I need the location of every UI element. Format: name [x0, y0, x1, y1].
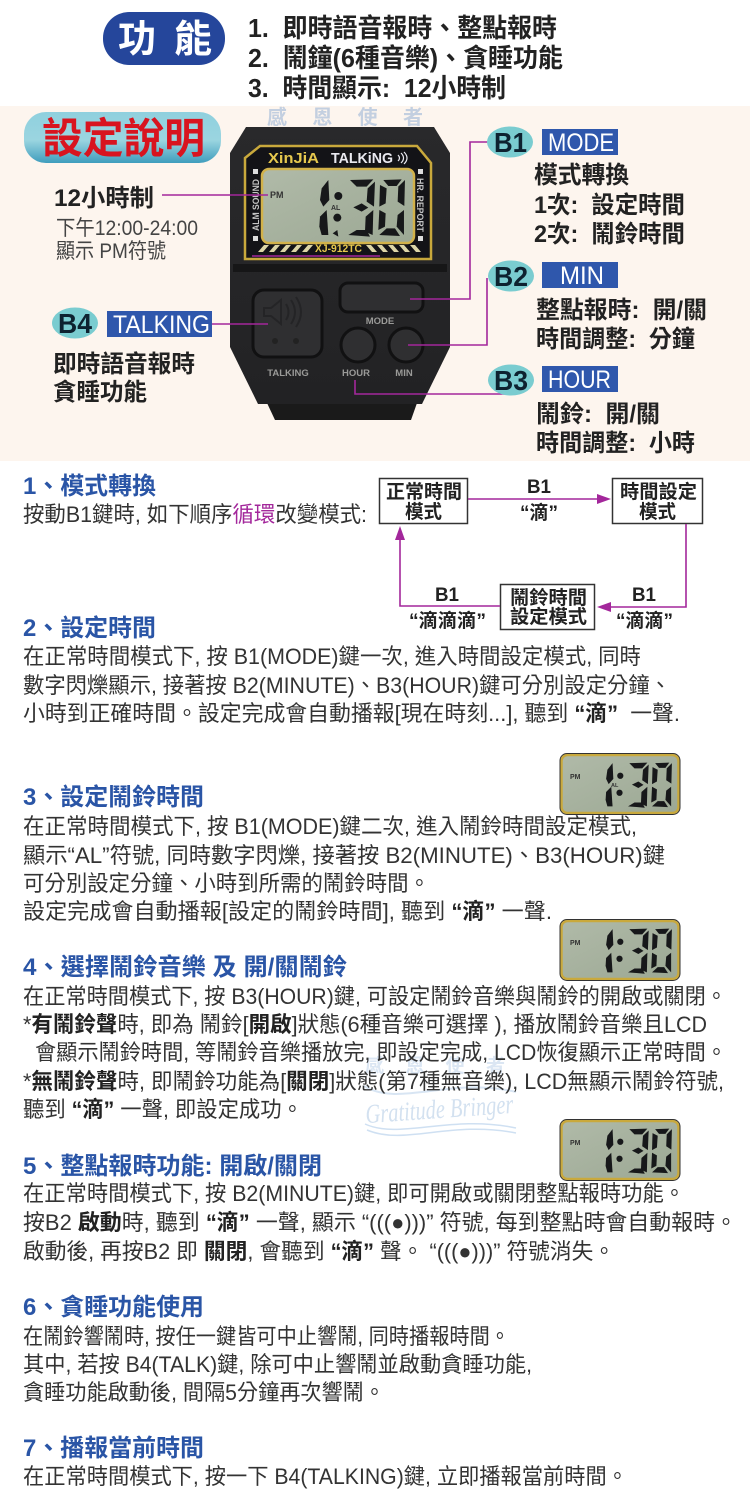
- callout: B4 TALKING: [52, 308, 212, 406]
- flow labels: [409, 477, 673, 632]
- section 4: alarm music: 在正常時間模式下, 按 B3(HOUR)鍵, 可設定鬧鈴音樂與鬧鈴的開啟或關閉。: [23, 984, 727, 1009]
- callout: B4 TALKING: TALKING: [113, 311, 210, 339]
- section 1: mode switching: 1、模式轉換: [23, 473, 156, 500]
- section 7: announce current time: [23, 1435, 628, 1489]
- callout: B3 HOUR: HOUR: [548, 366, 611, 394]
- callout: B2 MIN: 整點報時: 開/關: [536, 297, 707, 324]
- bezel labels: ALM SOUND: [251, 179, 261, 231]
- connector lines: [162, 142, 506, 394]
- box: alarm setting mode: 設定模式: [510, 605, 587, 628]
- gold bezel: [245, 146, 431, 259]
- LCD image 1: AL: [611, 783, 619, 789]
- box: time setting mode: 時間設定: [620, 480, 697, 503]
- flow labels: “滴滴”: [616, 609, 673, 632]
- section 4: alarm music: 4、選擇鬧鈴音樂 及 開/關鬧鈴: [23, 954, 347, 981]
- bezel labels: HR. REPORT: [415, 178, 425, 232]
- callout: B2 MIN: [488, 260, 707, 353]
- section 6: snooze: [23, 1294, 532, 1405]
- section 6: snooze: 貪睡功能啟動後, 間隔5分鐘再次響鬧。: [23, 1380, 385, 1405]
- callout: B4 TALKING: 貪睡功能: [53, 379, 147, 406]
- LCD image 1: [560, 754, 680, 814]
- LCD image 3: PM: [570, 1140, 581, 1147]
- callout: B4 TALKING: B4: [58, 308, 92, 339]
- flow labels: B1: [435, 585, 459, 606]
- button labels: HOUR: [342, 368, 370, 379]
- heading: setting instructions pill: 設定說明: [42, 115, 205, 162]
- flow labels: “滴”: [520, 501, 558, 524]
- watermark: Gratitude Bringer: Gratitude Bringer: [365, 1089, 515, 1129]
- flow diagram: [380, 477, 702, 632]
- section 4: alarm music: *無鬧鈴聲時, 即鬧鈴功能為[關閉]狀態(第7種無音樂), LCD無顯示鬧鈴符號,: [23, 1069, 724, 1094]
- LCD image 2: PM: [570, 940, 581, 947]
- button: minute: [389, 328, 423, 362]
- button labels: MIN: [395, 368, 413, 379]
- callout: 12 hour system: 12小時制: [54, 185, 154, 212]
- section 5: hourly chime: 5、整點報時功能: 開啟/關閉: [23, 1153, 322, 1180]
- callout: B2 MIN: B2: [494, 261, 528, 292]
- button: hour: [341, 328, 375, 362]
- device: talking watch: [230, 127, 450, 420]
- LCD image 2: [560, 920, 680, 980]
- section 3: set alarm: 3、設定鬧鈴時間: [23, 784, 204, 811]
- section 4: alarm music: 會顯示鬧鈴時間, 等鬧鈴音樂播放完, 即設定完成, LCD恢復顯示正常時間。: [35, 1040, 727, 1065]
- callout: B1 MODE: 1次: 設定時間: [534, 192, 685, 219]
- callout: B1 MODE: [487, 126, 685, 248]
- flow labels: B1: [527, 477, 551, 498]
- section 2: set time: 2、設定時間: [23, 615, 156, 642]
- section 5: hourly chime: 在正常時間模式下, 按 B2(MINUTE)鍵, 即可開啟或關閉整點報時功能。: [23, 1181, 685, 1206]
- bezel labels: TALKiNG: [331, 150, 393, 167]
- section 1: mode switching: 按動B1鍵時, 如下順序循環改變模式:: [23, 502, 367, 527]
- box: alarm setting mode: [500, 584, 594, 630]
- callout: B3 HOUR: [488, 364, 695, 457]
- flow labels: B1: [632, 585, 656, 606]
- section 4: alarm music: *有鬧鈴聲時, 即為 鬧鈴[開啟]狀態(6種音樂可選擇 ), 播放鬧鈴音樂且LCD: [23, 1012, 707, 1037]
- section 4: alarm music: [23, 954, 727, 1122]
- watermark: Gratitude Bringer: 感 恩 使 者: [365, 1054, 505, 1077]
- arrow: time setting to alarm setting: [597, 524, 686, 612]
- text block: features list: 2. 鬧鐘(6種音樂)、貪睡功能: [248, 43, 563, 73]
- callout: B3 HOUR: 鬧鈴: 開/關: [536, 401, 660, 428]
- text block: features list: 1. 即時語音報時、整點報時: [248, 13, 557, 43]
- main LCD: AL: [331, 205, 341, 212]
- text block: features list: 3. 時間顯示: 12小時制: [248, 73, 506, 103]
- bezel labels: XJ-912TC: [315, 243, 362, 255]
- text block: features list: [248, 13, 563, 103]
- box: normal time mode: [380, 478, 468, 524]
- heading: features pill: 能: [174, 19, 212, 61]
- callout: B3 HOUR: 時間調整: 小時: [536, 430, 695, 457]
- section 4: alarm music: 聽到 “滴” 一聲, 即設定成功。: [23, 1097, 303, 1122]
- callout: B1 MODE: 2次: 鬧鈴時間: [534, 221, 685, 248]
- bezel labels: XinJiA: [268, 150, 319, 167]
- arrow: normal to time setting: [468, 494, 611, 504]
- box: normal time mode: 正常時間: [386, 481, 462, 503]
- callout: B1 MODE: MODE: [548, 129, 614, 157]
- section 3: set alarm: 設定完成會自動播報[設定的鬧鈴時間], 聽到 “滴” 一聲.: [23, 899, 552, 924]
- main LCD: [262, 169, 414, 243]
- callout: B3 HOUR: B3: [494, 365, 528, 396]
- button labels: [267, 316, 413, 379]
- panel: setting background: [0, 106, 750, 461]
- section 2: set time: 在正常時間模式下, 按 B1(MODE)鍵一次, 進入時間設定模式, 同時: [23, 644, 641, 669]
- button: talking: [253, 290, 322, 357]
- arrow: alarm setting to normal: [395, 526, 500, 606]
- LCD image 3: [560, 1120, 680, 1180]
- section 2: set time: 小時到正確時間。設定完成會自動播報[現在時刻...], 聽到 “滴” 一聲.: [23, 701, 680, 726]
- LCD image 1: PM: [570, 774, 581, 781]
- section 5: hourly chime: [23, 1153, 737, 1264]
- callout: 12 hour system: [54, 185, 198, 263]
- section 6: snooze: 其中, 若按 B4(TALK)鍵, 除可中止響鬧並啟動貪睡功能,: [23, 1352, 532, 1377]
- heading: features pill: 功: [118, 19, 156, 61]
- box: normal time mode: 模式: [405, 501, 442, 523]
- section 3: set alarm: [23, 784, 665, 924]
- section 7: announce current time: 7、播報當前時間: [23, 1435, 204, 1462]
- section 1: mode switching: [23, 473, 367, 527]
- section 3: set alarm: 顯示“AL”符號, 同時數字閃爍, 接著按 B2(MINUTE)、B3(HOUR)鍵: [23, 843, 665, 868]
- heading: features pill: [103, 12, 225, 65]
- section 3: set alarm: 可分別設定分鐘、小時到所需的鬧鈴時間。: [23, 871, 430, 896]
- section 5: hourly chime: 啟動後, 再按B2 即 關閉, 會聽到 “滴” 聲。 “(((●)))” 符號消失。: [23, 1239, 615, 1264]
- callout: B2 MIN: MIN: [560, 262, 604, 290]
- section 3: set alarm: 在正常時間模式下, 按 B1(MODE)鍵二次, 進入鬧鈴時間設定模式,: [23, 814, 637, 839]
- bezel labels: [251, 150, 425, 255]
- button: mode: [340, 283, 423, 312]
- callout: 12 hour system: 顯示 PM符號: [56, 240, 166, 263]
- callout: 12 hour system: 下午12:00-24:00: [56, 217, 198, 240]
- button labels: MODE: [366, 316, 394, 327]
- section 6: snooze: 在鬧鈴響鬧時, 按任一鍵皆可中止響鬧, 同時播報時間。: [23, 1324, 510, 1349]
- callout: B4 TALKING: 即時語音報時: [53, 351, 195, 378]
- watch base: [267, 403, 417, 420]
- box: time setting mode: 模式: [639, 501, 676, 523]
- section 2: set time: 數字閃爍顯示, 接著按 B2(MINUTE)、B3(HOUR)鍵可分別設定分鐘、: [23, 673, 671, 698]
- main LCD: PM: [270, 190, 284, 200]
- callout: B1 MODE: B1: [494, 127, 527, 158]
- box: time setting mode: [612, 478, 702, 524]
- watermark: Gratitude Bringer: [364, 1054, 516, 1135]
- flow labels: “滴滴滴”: [409, 609, 486, 632]
- button labels: TALKING: [267, 368, 309, 379]
- section 6: snooze: 6、貪睡功能使用: [23, 1294, 204, 1321]
- callout: B2 MIN: 時間調整: 分鐘: [536, 326, 695, 353]
- section 2: set time: [23, 615, 680, 726]
- section 5: hourly chime: 按B2 啟動時, 聽到 “滴” 一聲, 顯示 “(((●)))” 符號, 每到整點時會自動報時。: [23, 1210, 737, 1235]
- watch body: [230, 127, 450, 404]
- section 7: announce current time: 在正常時間模式下, 按一下 B4(TALKING)鍵, 立即播報當前時間。: [23, 1464, 628, 1489]
- box: alarm setting mode: 鬧鈴時間: [510, 587, 587, 609]
- callout: B1 MODE: 模式轉換: [534, 162, 629, 189]
- watermark: top: 感 恩 使 者: [267, 105, 423, 129]
